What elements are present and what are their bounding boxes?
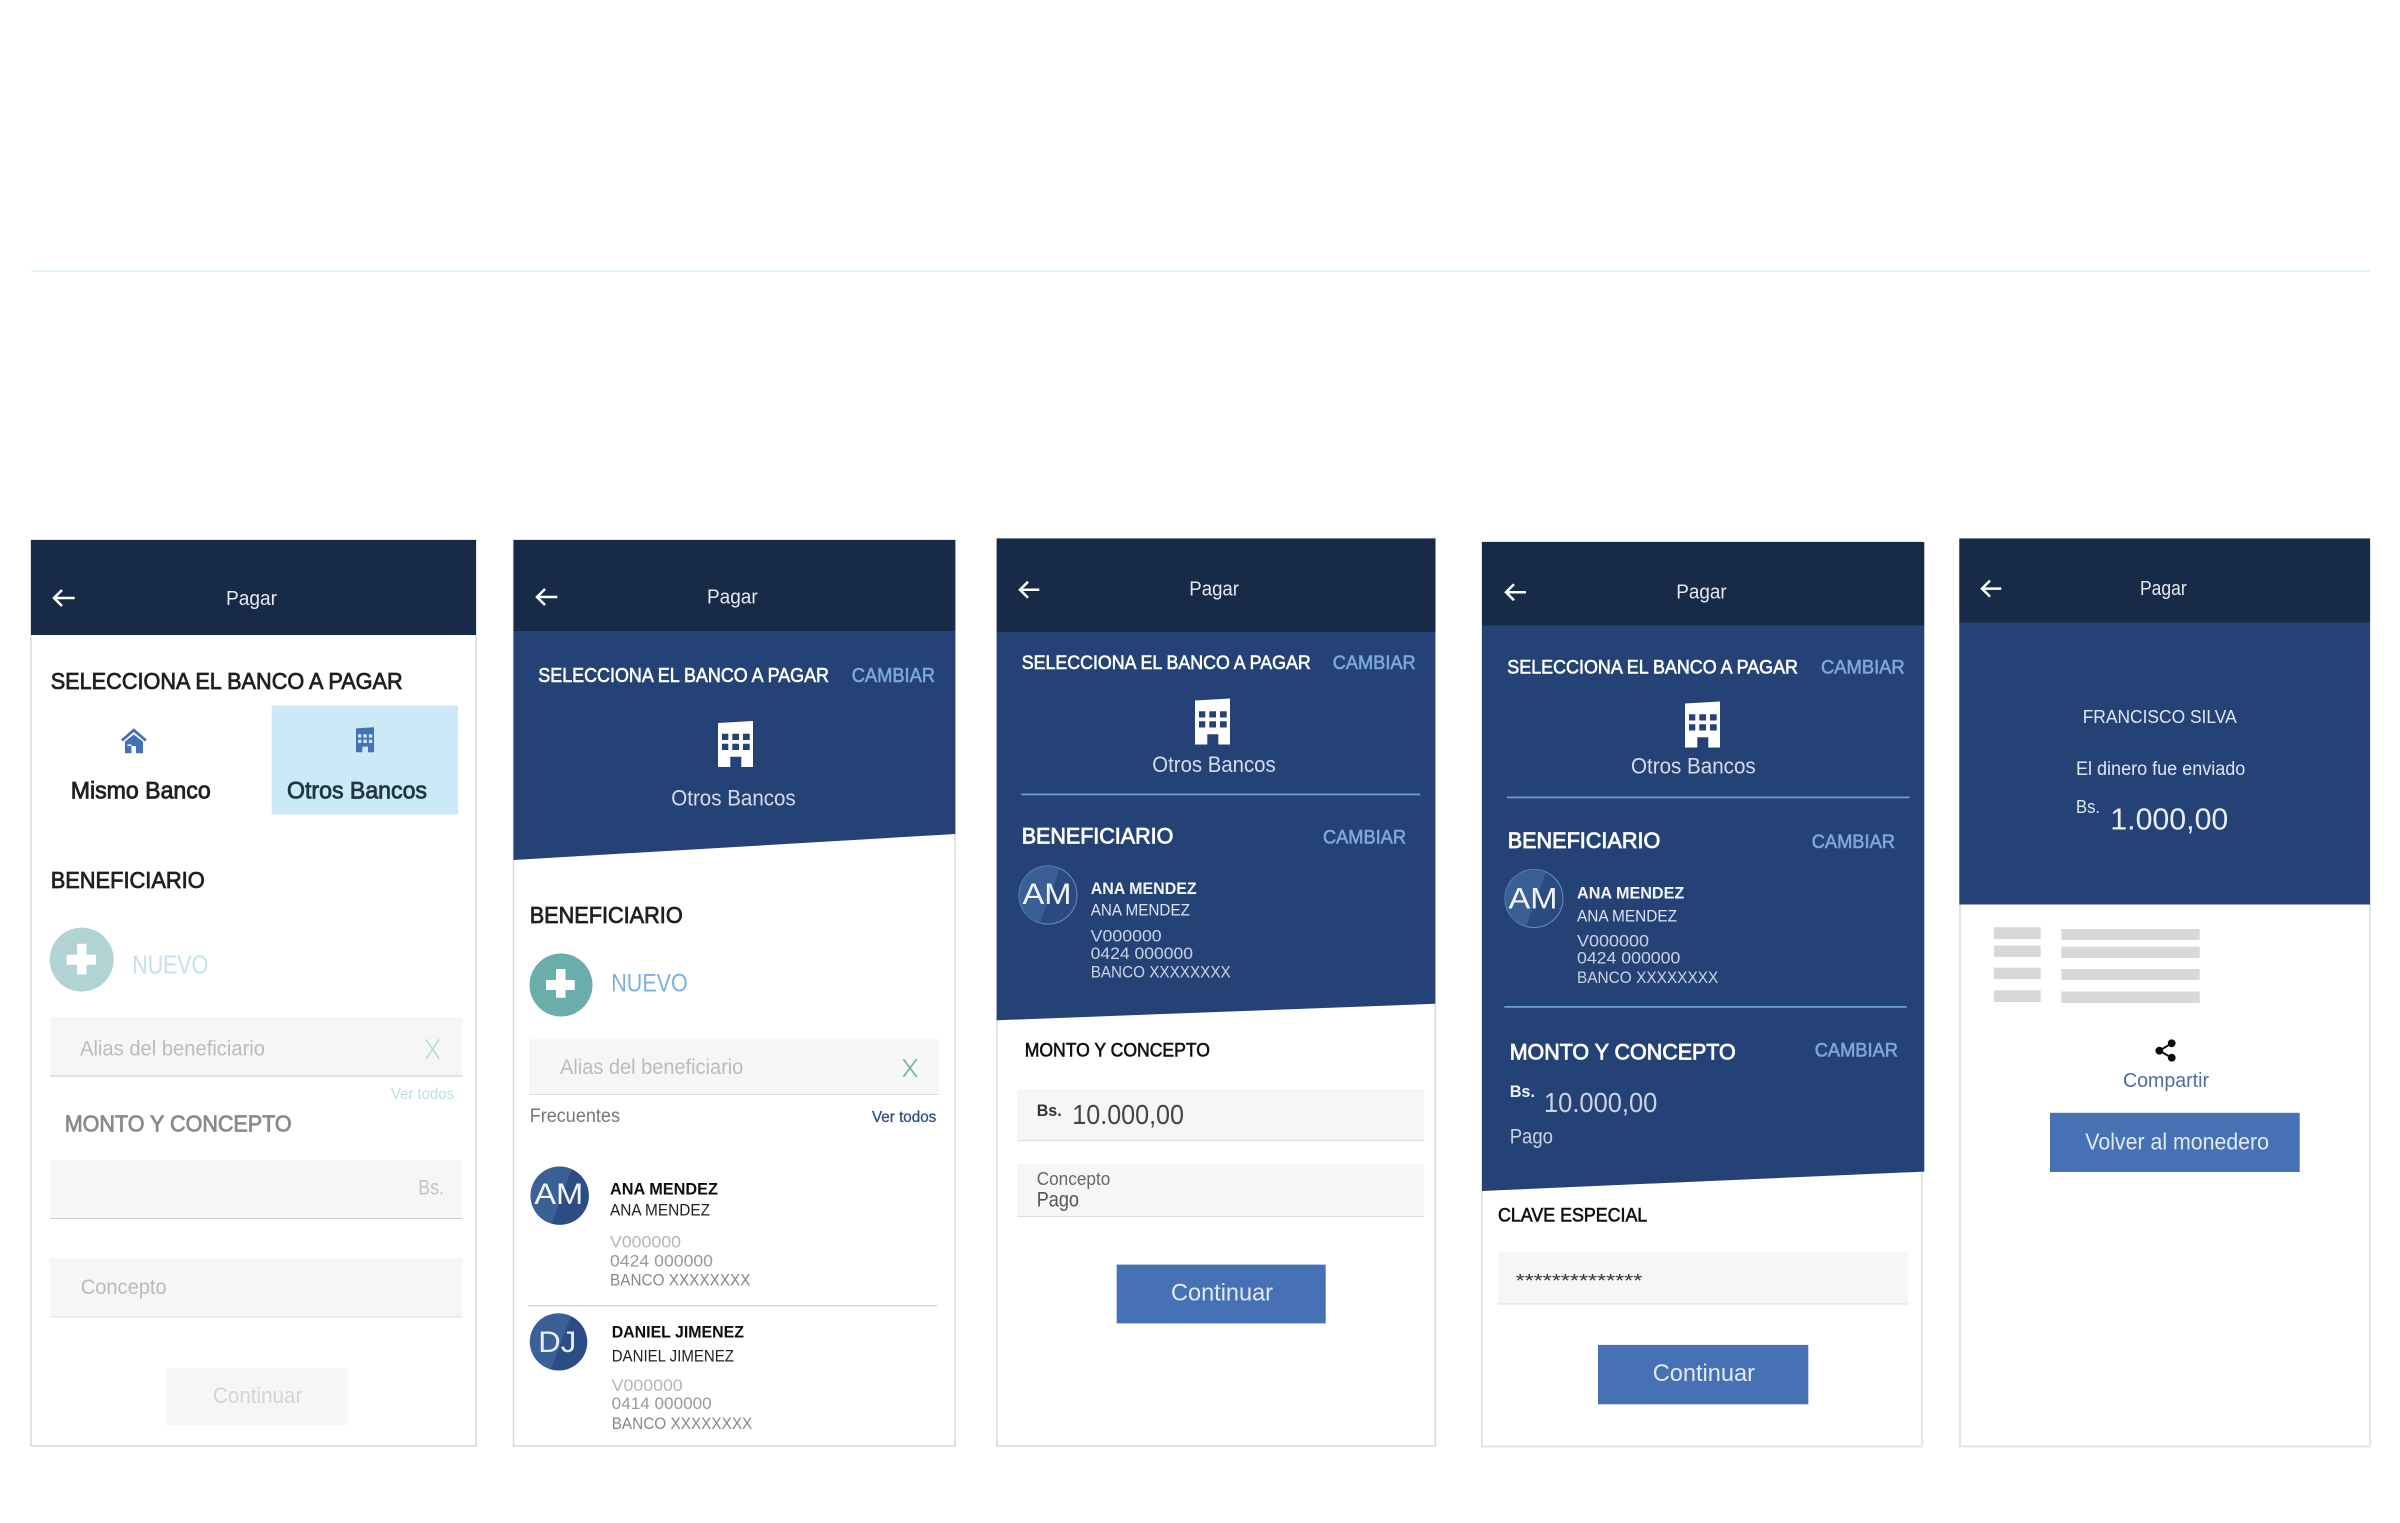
contact: Ana Mendez: 0424 000000 bbox=[610, 1252, 713, 1270]
button: continue: Continuar bbox=[1171, 1279, 1273, 1306]
label: same bank: Mismo Banco bbox=[71, 778, 211, 804]
field: amount: Bs. bbox=[1037, 1101, 1062, 1120]
avatar bbox=[530, 1313, 587, 1370]
link: change bank: CAMBIAR bbox=[1333, 653, 1416, 674]
contact: Daniel Jimenez: V000000 bbox=[612, 1377, 683, 1395]
contact: Ana Mendez: 0424 000000 bbox=[1577, 950, 1680, 968]
link: change bank: CAMBIAR bbox=[1821, 657, 1905, 678]
contact: Ana Mendez: ANA MENDEZ bbox=[610, 1181, 718, 1199]
amount value: 10.000,00 bbox=[1544, 1087, 1657, 1118]
field: concept: Pago bbox=[1037, 1188, 1079, 1212]
icon: add new bbox=[530, 954, 592, 1016]
button: back to wallet: Volver al monedero bbox=[2085, 1129, 2269, 1155]
amount value: Bs. bbox=[1510, 1082, 1535, 1101]
icon: add new bbox=[50, 928, 114, 992]
contact: Ana Mendez: ANA MENDEZ bbox=[610, 1202, 710, 1220]
label: new: NUEVO bbox=[611, 970, 688, 998]
heading: amount and concept: MONTO Y CONCEPTO bbox=[1510, 1040, 1736, 1065]
contact: Daniel Jimenez bbox=[530, 1313, 752, 1433]
option: same bank bbox=[71, 728, 211, 804]
heading: beneficiary: BENEFICIARIO bbox=[1508, 828, 1660, 853]
icon: house bbox=[121, 728, 147, 753]
label: other banks: Otros Bancos bbox=[1152, 752, 1276, 777]
icon: building bbox=[1685, 702, 1720, 748]
field: amount bbox=[50, 1160, 462, 1219]
label: frequent: Frecuentes bbox=[530, 1106, 620, 1127]
header bar bbox=[31, 540, 476, 635]
button: continue disabled bbox=[166, 1368, 348, 1425]
avatar: DJ bbox=[538, 1326, 576, 1359]
amount value bbox=[1510, 1082, 1657, 1118]
link: change beneficiary: CAMBIAR bbox=[1323, 828, 1406, 849]
contact: Ana Mendez: ANA MENDEZ bbox=[1577, 885, 1684, 903]
contact: Ana Mendez bbox=[1019, 866, 1231, 981]
heading: amount and concept: MONTO Y CONCEPTO bbox=[65, 1110, 292, 1136]
icon: building bbox=[718, 721, 753, 767]
contact: Ana Mendez: ANA MENDEZ bbox=[1091, 902, 1190, 920]
panel: screen 5 confirmation bbox=[1959, 538, 2370, 1446]
field: special key: ************** bbox=[1516, 1271, 1642, 1291]
screen title: Pagar bbox=[1676, 582, 1727, 604]
contact: Ana Mendez: V000000 bbox=[1091, 928, 1162, 946]
icon: back arrow bbox=[54, 590, 75, 606]
concept value: Pago bbox=[1510, 1126, 1553, 1149]
field: alias: Alias del beneficiario bbox=[560, 1056, 743, 1079]
header bar bbox=[514, 540, 955, 631]
screen title: Pagar bbox=[1189, 578, 1239, 600]
heading: beneficiary: BENEFICIARIO bbox=[51, 867, 205, 893]
heading: beneficiary: BENEFICIARIO bbox=[530, 902, 683, 928]
label: other banks: Otros Bancos bbox=[287, 778, 427, 804]
icon: back arrow bbox=[1020, 582, 1039, 598]
contact: Ana Mendez: BANCO XXXXXXXX bbox=[610, 1272, 750, 1290]
contact: Ana Mendez bbox=[1505, 870, 1718, 987]
panel: screen 4 special key bbox=[1482, 542, 1924, 1446]
field: amount bbox=[1017, 1090, 1424, 1141]
avatar: AM bbox=[1022, 878, 1072, 911]
recipient name: FRANCISCO SILVA bbox=[2083, 707, 2237, 727]
heading: select bank: SELECCIONA EL BANCO A PAGAR bbox=[51, 668, 403, 694]
panel: screen 2 beneficiary bbox=[514, 540, 955, 1446]
avatar: AM bbox=[1508, 882, 1558, 916]
field: concept bbox=[50, 1258, 462, 1318]
amount sent: 1.000,00 bbox=[2110, 802, 2228, 836]
summary band bbox=[997, 632, 1435, 1020]
contact: Ana Mendez: ANA MENDEZ bbox=[1091, 880, 1197, 898]
heading: special key: CLAVE ESPECIAL bbox=[1498, 1205, 1647, 1226]
heading: select bank: SELECCIONA EL BANCO A PAGAR bbox=[1507, 657, 1798, 678]
panel: screen 1 select bank bbox=[31, 540, 476, 1446]
panel: screen 3 amount and concept bbox=[997, 538, 1435, 1446]
button: continue: Continuar bbox=[1653, 1360, 1755, 1387]
button: continue bbox=[1598, 1345, 1808, 1404]
amount sent bbox=[2076, 797, 2228, 836]
header bar bbox=[1482, 542, 1924, 626]
link: see all: Ver todos bbox=[872, 1109, 936, 1126]
field: amount: 10.000,00 bbox=[1072, 1099, 1184, 1130]
header bar bbox=[997, 538, 1435, 632]
summary band bbox=[1482, 626, 1924, 1191]
contact: Daniel Jimenez: DANIEL JIMENEZ bbox=[612, 1348, 734, 1366]
status message: El dinero fue enviado bbox=[2076, 759, 2245, 780]
contact: Ana Mendez: V000000 bbox=[610, 1233, 681, 1251]
confirmation band bbox=[1959, 622, 2370, 904]
button: continue disabled: Continuar bbox=[213, 1383, 302, 1408]
summary band bbox=[514, 631, 955, 860]
receipt placeholder lines bbox=[1994, 927, 2200, 1003]
avatar bbox=[1505, 870, 1563, 928]
field: concept: Concepto bbox=[1037, 1169, 1110, 1189]
contact: Ana Mendez: BANCO XXXXXXXX bbox=[1577, 969, 1718, 987]
heading: select bank: SELECCIONA EL BANCO A PAGAR bbox=[1022, 653, 1311, 674]
avatar bbox=[530, 1166, 589, 1225]
icon: building bbox=[356, 727, 374, 752]
icon: back arrow bbox=[1982, 581, 2001, 597]
label: other banks: Otros Bancos bbox=[671, 786, 796, 811]
icon: building bbox=[1195, 698, 1230, 744]
field: concept bbox=[1017, 1164, 1424, 1217]
screen title: Pagar bbox=[707, 586, 758, 608]
contact: Daniel Jimenez: 0414 000000 bbox=[612, 1395, 712, 1413]
contact: Ana Mendez: 0424 000000 bbox=[1091, 945, 1193, 963]
field: amount: Bs. bbox=[418, 1176, 444, 1199]
contact: Daniel Jimenez: DANIEL JIMENEZ bbox=[612, 1324, 744, 1342]
contact: Ana Mendez: ANA MENDEZ bbox=[1577, 907, 1677, 925]
icon: back arrow bbox=[1506, 584, 1526, 600]
link: see all: Ver todos bbox=[391, 1086, 454, 1103]
contact: Ana Mendez bbox=[530, 1166, 750, 1290]
field: alias bbox=[50, 1017, 462, 1076]
field: special key bbox=[1498, 1252, 1908, 1304]
contact: Daniel Jimenez: BANCO XXXXXXXX bbox=[612, 1415, 752, 1433]
option: other banks selected bbox=[272, 706, 458, 814]
heading: beneficiary: BENEFICIARIO bbox=[1022, 824, 1173, 849]
field: concept: Concepto bbox=[81, 1276, 167, 1299]
amount sent: Bs. bbox=[2076, 797, 2100, 817]
avatar: AM bbox=[534, 1178, 583, 1211]
link: change: CAMBIAR bbox=[852, 665, 935, 687]
header bar bbox=[1959, 538, 2370, 622]
contact: Ana Mendez: BANCO XXXXXXXX bbox=[1091, 963, 1231, 981]
icon: share bbox=[2156, 1040, 2175, 1061]
label: other banks: Otros Bancos bbox=[1631, 754, 1756, 779]
field: alias bbox=[529, 1039, 939, 1095]
heading: select bank: SELECCIONA EL BANCO A PAGAR bbox=[538, 665, 829, 687]
link: share: Compartir bbox=[2123, 1070, 2209, 1092]
label: new: NUEVO bbox=[132, 949, 208, 979]
link: change amount: CAMBIAR bbox=[1815, 1041, 1898, 1062]
link: change beneficiary: CAMBIAR bbox=[1812, 832, 1895, 853]
button: back to wallet bbox=[2050, 1113, 2300, 1172]
heading: amount and concept: MONTO Y CONCEPTO bbox=[1025, 1041, 1210, 1062]
icon: back arrow bbox=[537, 589, 557, 605]
field: alias: Alias del beneficiario bbox=[80, 1037, 265, 1060]
screen title: Pagar bbox=[2140, 578, 2187, 600]
screen title: Pagar bbox=[226, 588, 277, 610]
button: continue bbox=[1117, 1265, 1326, 1323]
avatar bbox=[1019, 866, 1077, 924]
contact: Ana Mendez: V000000 bbox=[1577, 932, 1649, 950]
